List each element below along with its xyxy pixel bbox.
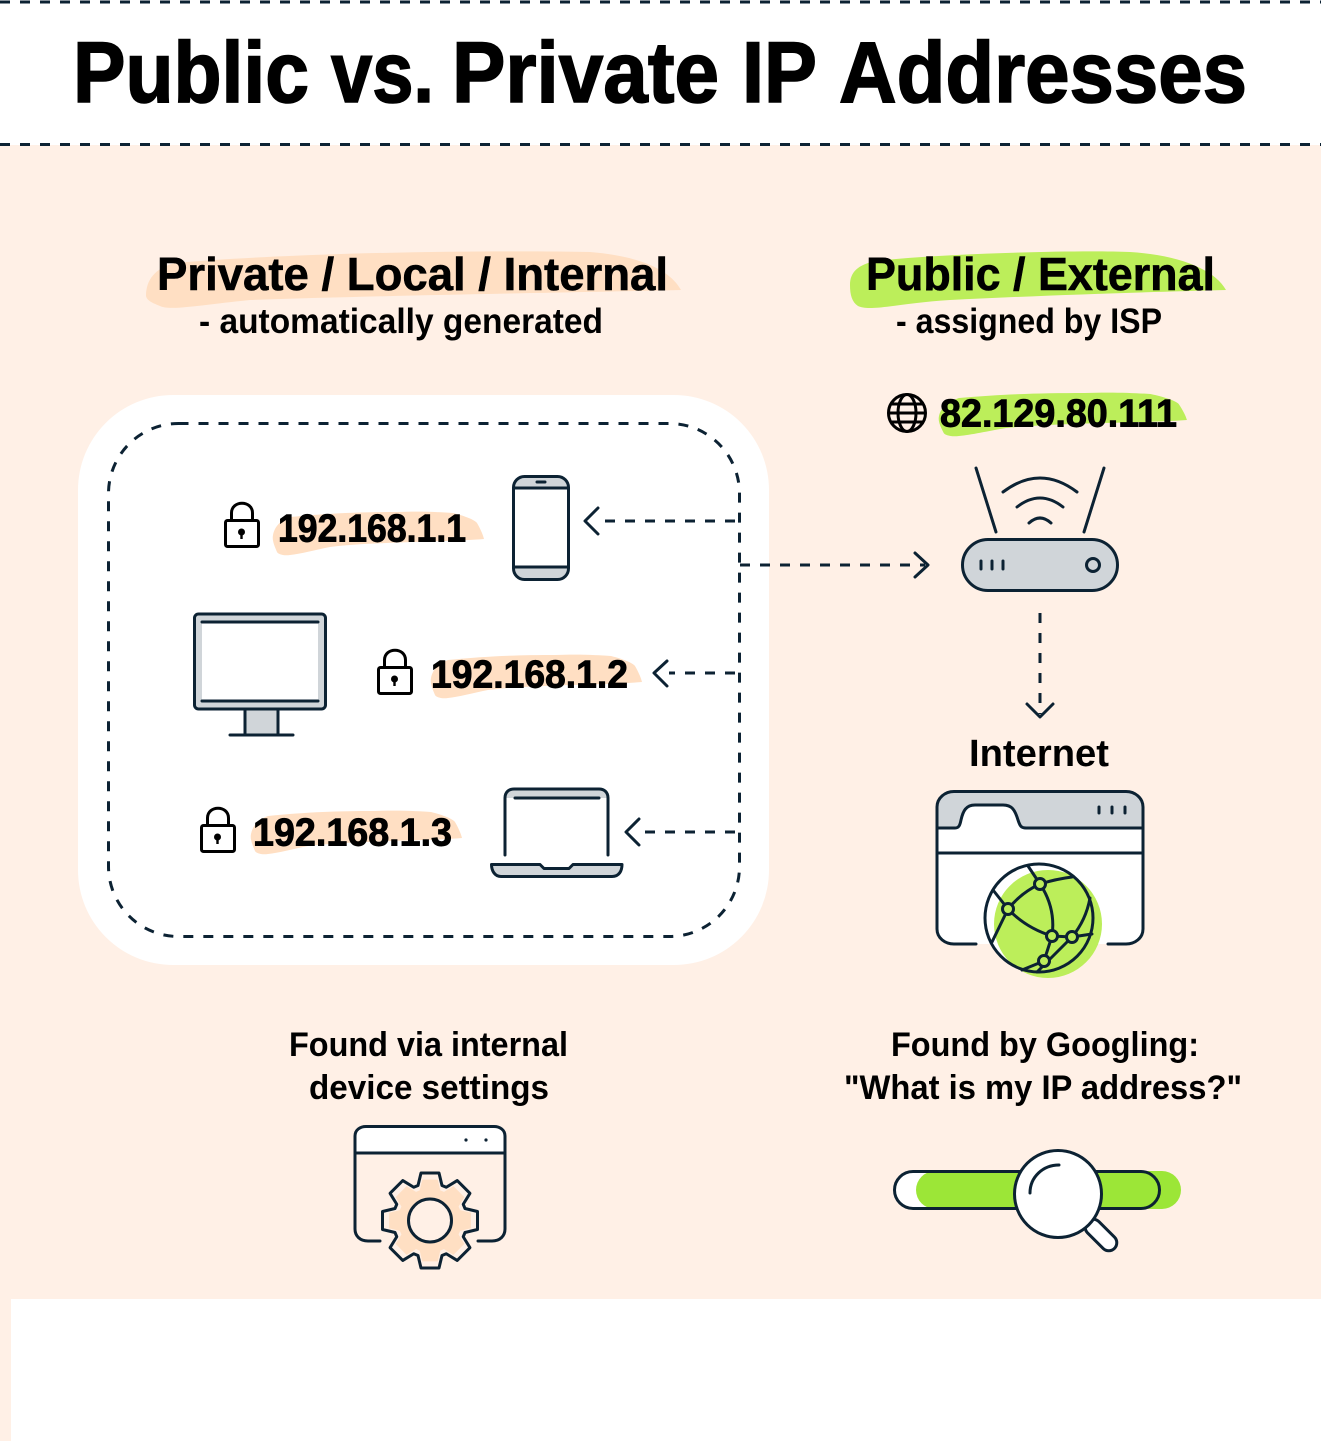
arrow to monitor: [654, 661, 735, 686]
icon: internet browser with globe: [937, 792, 1143, 978]
text: found via settings: device settings: [309, 1069, 549, 1107]
icon: settings window with gear: [355, 1126, 505, 1268]
private row 3: [202, 808, 462, 854]
title: IP: [742, 25, 817, 121]
title: Public: [73, 25, 309, 121]
panel: private network: [78, 395, 769, 965]
heading: public: [850, 248, 1226, 341]
text: found by googling: [844, 1026, 1242, 1107]
ip text 1: 192.168.1.1: [278, 508, 466, 550]
internet label: Internet: [969, 733, 1109, 775]
icon: lock 2: [378, 650, 412, 694]
public ip text: 82.129.80.111: [940, 392, 1177, 436]
icon: laptop: [492, 789, 622, 876]
title: Addresses: [839, 25, 1247, 121]
ip text 2: 192.168.1.2: [431, 654, 628, 696]
text: found by googling: "What is my IP address?": [844, 1069, 1242, 1107]
icon: lock 3: [202, 808, 234, 852]
heading: private: Private / Local / Internal: [157, 248, 668, 300]
public ip: [888, 392, 1187, 436]
icon: desktop monitor: [194, 614, 326, 735]
text: found via settings: [289, 1026, 568, 1107]
text: found via settings: Found via internal: [289, 1026, 568, 1064]
icon: lock 1: [226, 503, 258, 546]
text: found by googling: Found by Googling:: [891, 1026, 1199, 1064]
icon: phone: [514, 476, 568, 580]
private row 2: [378, 650, 642, 698]
heading: private: [146, 248, 681, 341]
title: [73, 25, 1247, 121]
ip highlight 3: [251, 811, 462, 854]
arrow to laptop: [626, 819, 735, 845]
ip text 3: 192.168.1.3: [253, 812, 452, 854]
heading: public: Public / External: [866, 248, 1215, 300]
icon: search bar with magnifier: [894, 1150, 1181, 1254]
arrow to router: [740, 553, 928, 577]
private row 1: [226, 503, 484, 555]
heading: public: - assigned by ISP: [896, 302, 1162, 341]
arrow to phone: [585, 508, 735, 534]
title: Private: [452, 25, 719, 121]
public ip highlight: [939, 393, 1187, 436]
arrow to internet: [1027, 613, 1053, 717]
heading: private: - automatically generated: [199, 302, 603, 341]
ip highlight 1: [273, 512, 484, 555]
icon: globe: [888, 394, 926, 432]
title: vs.: [331, 25, 434, 121]
icon: router: [962, 468, 1118, 590]
ip highlight 2: [431, 655, 642, 698]
